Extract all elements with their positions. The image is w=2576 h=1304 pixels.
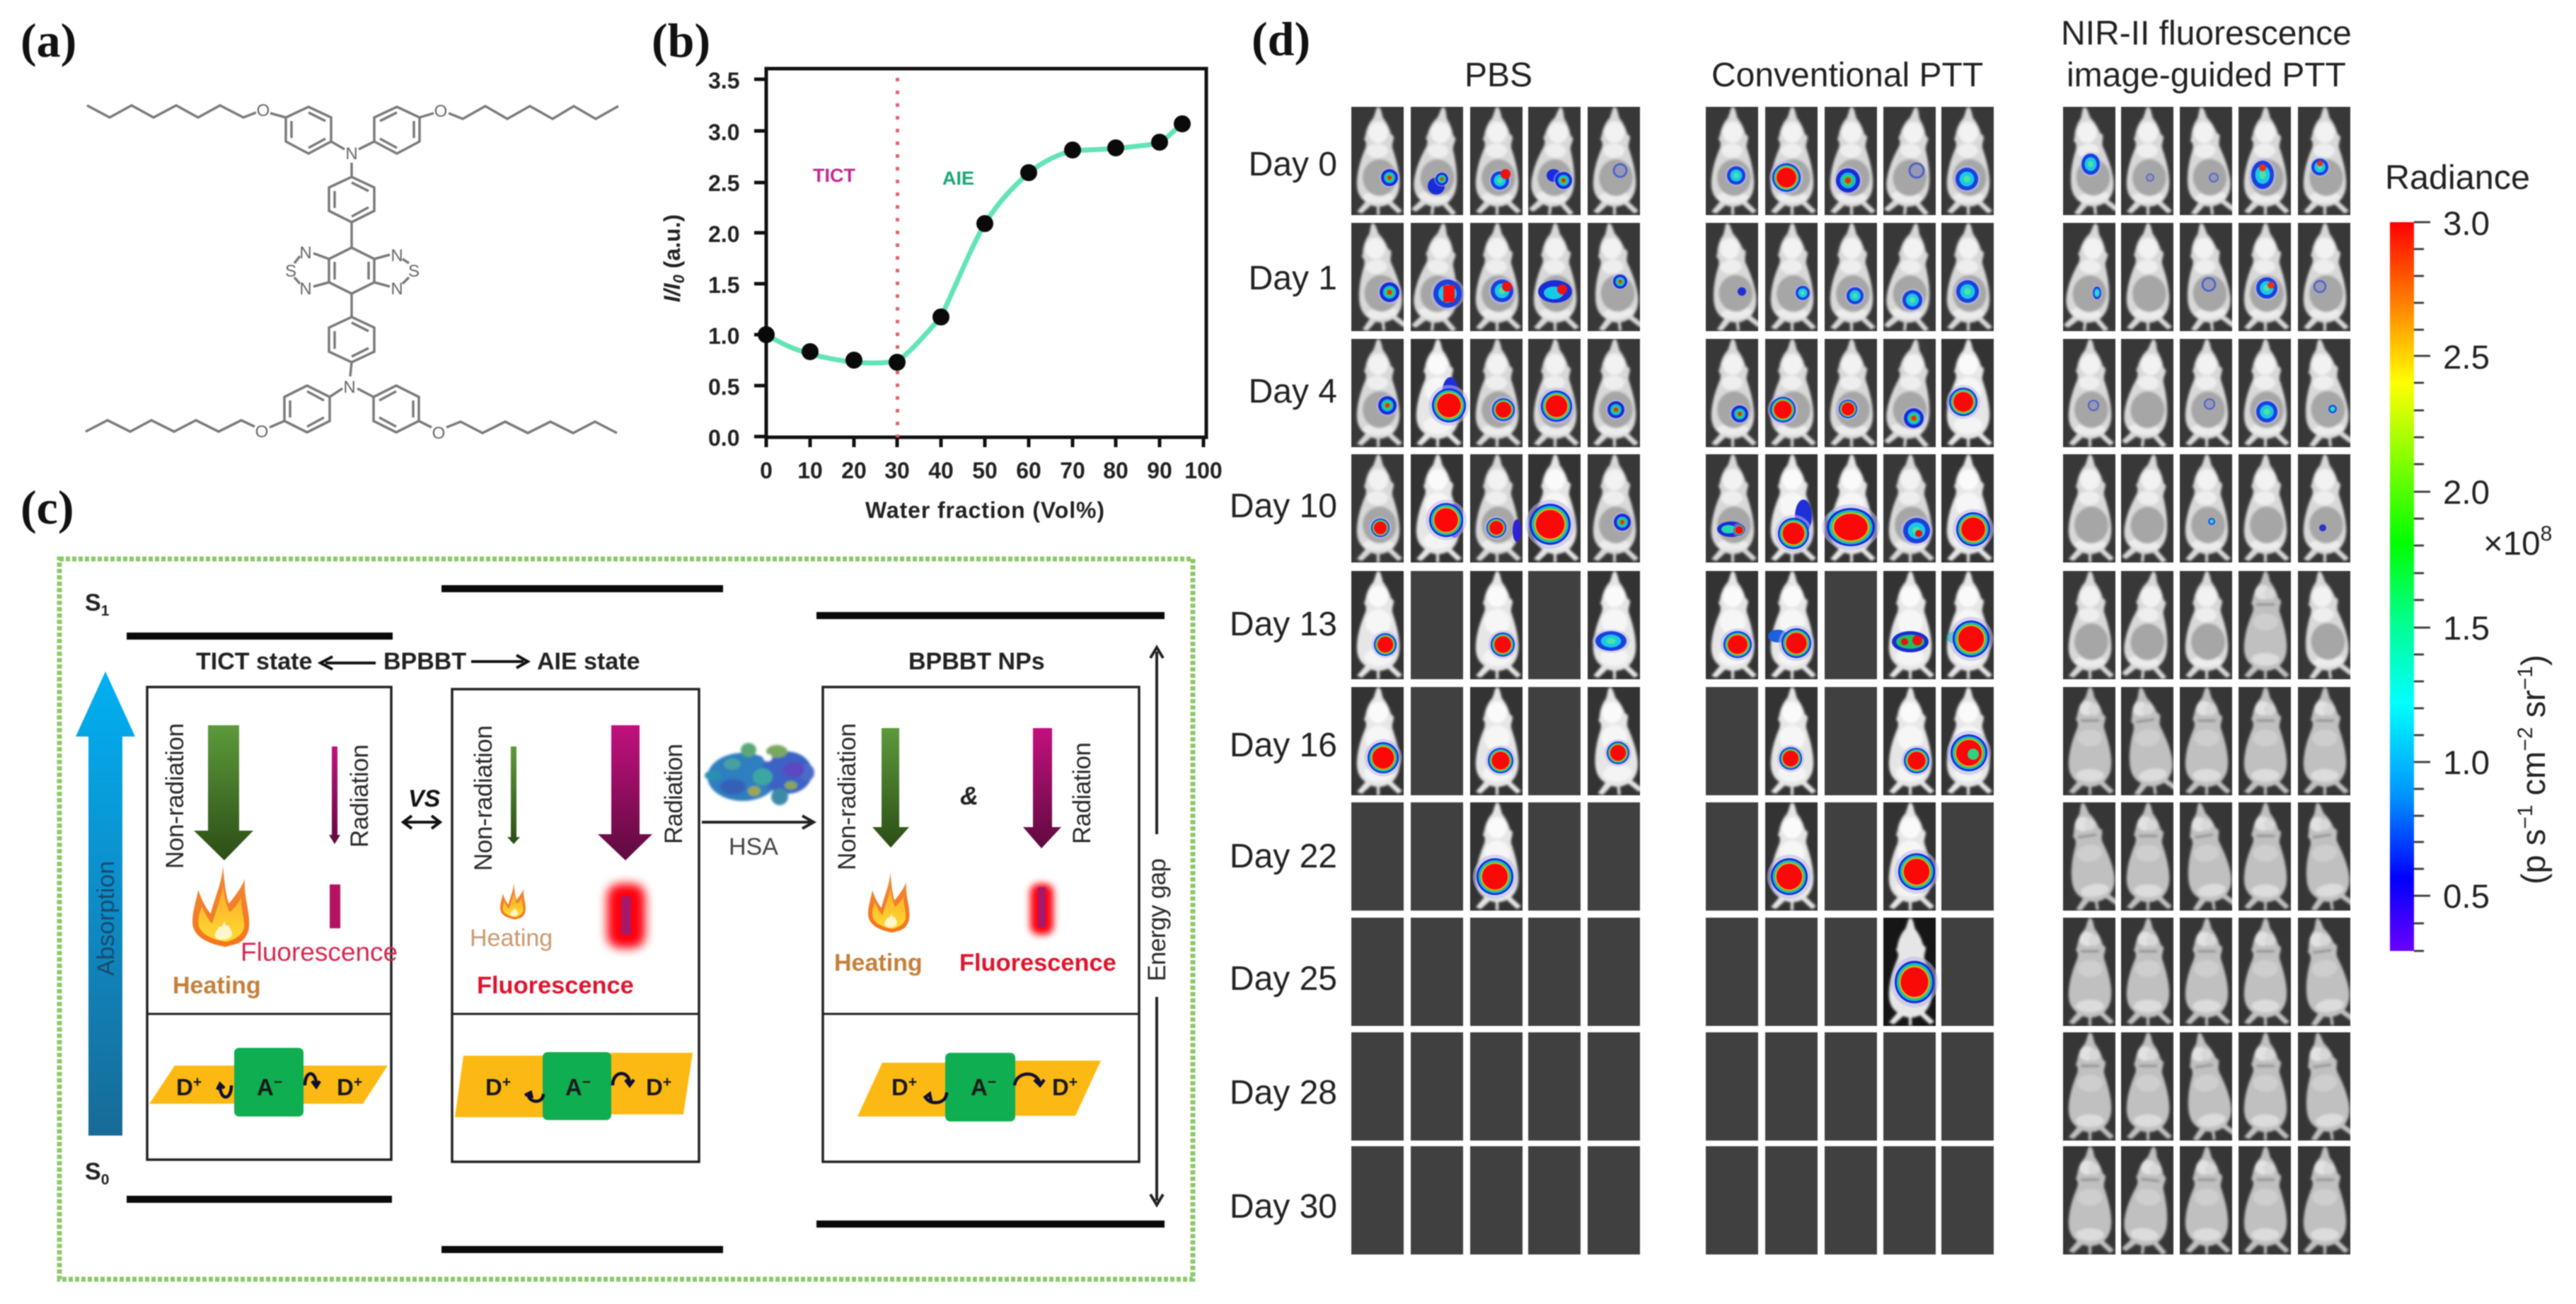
donor-acceptor diagram [455,1052,693,1120]
box: AIE state [452,689,699,1162]
y axis labels: 2.0 [708,221,739,247]
PBS Day 10 [1351,454,1640,562]
VS label and arrow [403,785,441,829]
y axis title: 0 [670,274,688,283]
state headings: AIE state [537,648,640,675]
box: TICT state [147,687,398,1160]
PBS Day 22 [1351,802,1640,911]
radiation label: Radiation [346,744,374,848]
ring: top right phenyl [374,107,420,154]
fluorescence label: Fluorescence [477,972,634,999]
Conventional Day 10 [1706,454,1994,562]
radiation arrow [329,746,340,844]
y axis labels: 2.5 [708,171,739,196]
donor-acceptor diagram: + [354,1074,362,1090]
donor-acceptor diagram [857,1053,1101,1121]
PBS Day 0 [1351,105,1640,217]
panel label (c): (c) [21,480,74,534]
panel label (a): (a) [21,13,76,67]
NIR-II Day 16 [2063,684,2350,797]
unit label: −2 [2514,727,2537,751]
donor-acceptor diagram: + [193,1074,202,1090]
x axis labels [760,458,1223,483]
multiplier: ×10 [2483,525,2541,562]
radiation label: Radiation [1068,742,1096,844]
donor-acceptor diagram: A [257,1074,274,1100]
NIR-II Day 10 [2063,452,2350,565]
unit label: ) [2514,654,2552,666]
colour bar values: 0.5 [2443,878,2490,916]
benzobisthiadiazole core: N [299,279,312,299]
benzobisthiadiazole core: S [408,262,420,281]
ring: upper central phenyl [329,177,374,222]
donor-acceptor diagram: + [502,1074,511,1090]
PBS Day 16 [1351,685,1644,797]
x axis labels: 10 [797,458,823,483]
non-radiation arrow [194,725,253,860]
fluorescence glow [607,884,645,948]
mouse grid: NIR-II image-guided PTT group [2062,105,2356,1257]
data points [758,115,1191,371]
state headings: BPBBT [383,648,466,675]
y axis labels: 3.5 [708,68,739,93]
state headings: TICT state [196,648,312,675]
x axis labels: 30 [884,458,910,483]
Conventional Day 16 [1706,687,1994,795]
panel label (b): (b) [652,13,710,67]
Conventional Day 30 [1706,1146,1994,1254]
y axis labels: 3.0 [708,120,739,145]
donor-acceptor diagram: A [565,1074,582,1100]
Conventional Day 13 [1706,571,1994,679]
NIR-II Day 0 [2063,105,2350,217]
heading: NIR-II image-guided PTT: image-guided PTT [2067,57,2346,94]
NIR-II Day 22 [2062,800,2356,913]
radiance legend [2385,158,2552,951]
chemical structure of BPBBT: O [257,101,270,120]
x axis labels: 70 [1060,458,1085,483]
donor-acceptor diagram: + [663,1074,671,1090]
donor-acceptor diagram: D [176,1074,193,1100]
donor-acceptor diagram: D [337,1074,354,1100]
green arrow [872,728,909,848]
day labels: Day 30 [1230,1188,1337,1225]
non-radiation label: Non-radiation [161,723,189,869]
big purple arrow [598,725,652,860]
line chart: I/I0 vs water fraction [659,68,1223,523]
colour bar values: 2.0 [2443,474,2490,512]
day labels: Day 10 [1230,487,1337,525]
unit label: (p s [2514,829,2552,884]
colour bar values: 1.0 [2443,744,2490,782]
donor-acceptor diagram: − [582,1074,591,1090]
non-radiation label: Non-radiation [470,725,497,871]
NIR-II Day 30 [2063,1144,2350,1257]
benzobisthiadiazole core: N [391,279,403,299]
day labels: Day 1 [1249,260,1337,297]
Conventional Day 25 [1706,918,1994,1026]
donor-acceptor diagram: D [1052,1074,1069,1100]
donor-acceptor diagram: − [274,1074,282,1090]
fluorescence label: Fluorescence [959,950,1116,976]
energy gap arrow [1143,647,1171,1205]
box: BPBBT NPs [823,687,1139,1162]
heading: NIR-II image-guided PTT: NIR-II fluorescence [2061,15,2352,52]
thin green arrow [507,746,520,844]
TICT label: TICT [813,165,855,186]
VS label and arrow: VS [408,785,441,812]
benzobisthiadiazole core [285,243,420,299]
PBS Day 4 [1351,339,1640,447]
unit label: −1 [2514,666,2537,690]
chemical structure of BPBBT: N [343,378,356,397]
Conventional Day 0 [1706,105,1994,217]
small flame icon [500,883,526,920]
chemical structure of BPBBT: N [345,144,358,163]
PBS Day 30 [1351,1146,1640,1254]
PBS Day 28 [1351,1032,1640,1141]
colour bar values: 2.5 [2443,339,2490,376]
energy levels: S1 and S0 bars [127,585,1165,1253]
colour bar [2390,222,2414,951]
day labels: Day 28 [1230,1074,1337,1112]
multiplier: 8 [2541,522,2552,546]
radiation label: Radiation [660,744,688,844]
day labels: Day 13 [1230,606,1337,643]
day labels: Day 16 [1230,727,1337,764]
unit label: sr [2514,690,2552,727]
chemical structure of BPBBT [86,101,618,443]
x axis labels: 0 [760,458,773,483]
Conventional Day 1 [1706,221,1994,333]
day labels: Day 22 [1230,838,1337,875]
panel c: energy diagram frame [59,559,1193,1279]
fluorescence label: Fluorescence [241,937,398,967]
ring: lower central phenyl [329,317,374,362]
colour bar ticks [2414,222,2430,951]
day labels: Day 25 [1230,960,1337,998]
donor-acceptor diagram: D [891,1074,908,1100]
heading: PBS: PBS [1465,57,1532,94]
y axis title: I/I [659,282,685,302]
flame icon [868,872,910,933]
non-radiation label: Non-radiation [833,723,861,870]
heating label: Heating [834,950,923,976]
y axis labels: 1.0 [708,323,739,349]
fluorescence bar [330,884,340,928]
heating label: Heating [470,925,553,952]
S1 label: S [85,589,101,616]
day labels: Day 4 [1249,373,1337,410]
chemical structure of BPBBT: O [434,102,447,121]
absorption arrow [76,671,135,1136]
y axis labels: 0.5 [708,374,739,400]
benzobisthiadiazole core: S [285,262,296,281]
AIE label: AIE [942,168,974,189]
absorption arrow: Absorption [93,861,120,976]
x axis labels: 100 [1184,458,1223,483]
purple arrow [1023,728,1061,848]
x axis labels: 40 [928,458,954,483]
Conventional Day 28 [1706,1032,1994,1141]
heating label: Heating [173,972,261,999]
y axis labels: 0.0 [708,425,739,451]
S0 label: 0 [101,1172,109,1188]
PBS Day 25 [1351,918,1640,1026]
heading: Conventional PTT: Conventional PTT [1711,57,1983,94]
protein blob [705,743,814,805]
day labels [1230,146,1337,1225]
unit label: cm [2514,751,2552,804]
x axis labels: 90 [1147,458,1172,483]
donor-acceptor diagram: D [646,1074,663,1100]
S0 label: S [85,1158,101,1185]
donor-acceptor diagram: + [1069,1074,1078,1090]
NIR-II Day 1 [2063,221,2350,333]
mouse grid: PBS group [1351,105,1644,1254]
y axis labels: 1.5 [708,272,739,298]
Conventional Day 4 [1706,337,1994,449]
NIR-II Day 4 [2063,337,2355,449]
day labels: Day 0 [1249,146,1337,183]
PBS Day 1 [1351,221,1644,333]
mouse grid: Conventional PTT group [1706,105,1994,1254]
x axis title: Water fraction (Vol%) [865,497,1104,523]
panel label (d): (d) [1252,12,1310,66]
y axis labels [708,68,739,451]
colour bar values: 1.5 [2443,610,2490,647]
NIR-II Day 13 [2063,569,2355,681]
chemical structure of BPBBT: O [255,422,268,442]
donor-acceptor diagram: A [971,1074,988,1100]
ring: bottom right phenyl [374,386,419,432]
ampersand: & [960,781,978,810]
x axis labels: 60 [1016,458,1041,483]
ring: bottom left phenyl [284,386,330,432]
NIR-II Day 25 [2063,915,2356,1028]
unit label: −1 [2514,804,2537,829]
flame icon [192,866,249,947]
HSA label: HSA [729,833,778,860]
dotted threshold line [896,78,899,437]
S1 label: 1 [101,603,110,619]
legend title: Radiance [2385,158,2530,197]
donor-acceptor diagram: D [485,1074,502,1100]
data curve [766,124,1182,363]
Conventional Day 22 [1706,802,1994,911]
heading: NIR-II image-guided PTT [2061,15,2352,94]
y axis title: (a.u.) [659,214,685,275]
x axis labels: 20 [841,458,867,483]
state headings [196,648,1045,675]
NIR-II Day 28 [2063,1029,2356,1143]
x axis labels: 50 [972,458,998,483]
x axis labels: 80 [1103,458,1128,483]
ring: top left phenyl [286,107,331,154]
donor-acceptor diagram: − [988,1074,996,1090]
PBS Day 13 [1351,571,1640,679]
HSA protein and arrow [702,743,814,860]
donor-acceptor diagram [149,1048,388,1117]
benzobisthiadiazole core: N [299,243,312,262]
donor-acceptor diagram: + [908,1074,917,1090]
colour bar values [2443,205,2490,916]
energy gap label: Energy gap [1143,858,1171,981]
fluorescence glow [1030,884,1053,935]
colour bar values: 3.0 [2443,205,2490,243]
state headings: BPBBT NPs [908,648,1045,675]
benzobisthiadiazole core: N [391,246,403,265]
chemical structure of BPBBT: O [432,424,445,443]
